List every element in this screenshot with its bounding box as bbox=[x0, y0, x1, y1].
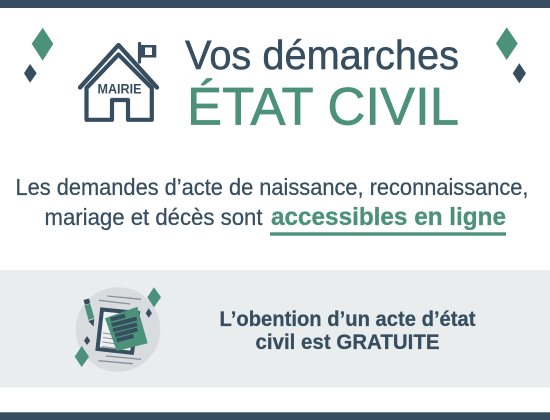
intro text: Les demandes d’acte de naissance, reconnaissance, bbox=[16, 174, 528, 200]
intro text: mariage et décès sont bbox=[44, 204, 263, 230]
icon: documents and pen bbox=[75, 287, 161, 372]
title bbox=[185, 32, 459, 136]
top bar bbox=[0, 0, 550, 8]
title: ÉTAT CIVIL bbox=[187, 78, 459, 136]
icon: pen bbox=[84, 298, 94, 326]
title: Vos démarches bbox=[185, 32, 459, 78]
panel: free of charge band bbox=[0, 270, 550, 388]
bottom bar bbox=[0, 412, 550, 420]
text: free of charge: civil est GRATUITE bbox=[256, 331, 440, 354]
icon: town hall house bbox=[80, 44, 157, 120]
highlighted text: accessibles en ligne: accessibles en ligne bbox=[271, 203, 506, 231]
icon: right diamonds bbox=[496, 27, 526, 83]
text: free of charge bbox=[220, 308, 476, 354]
text: free of charge: L’obention d’un acte d’état bbox=[220, 308, 476, 331]
icon label: MAIRIE: MAIRIE bbox=[98, 80, 142, 96]
intro text bbox=[16, 174, 528, 236]
icon: left diamonds bbox=[24, 28, 53, 83]
